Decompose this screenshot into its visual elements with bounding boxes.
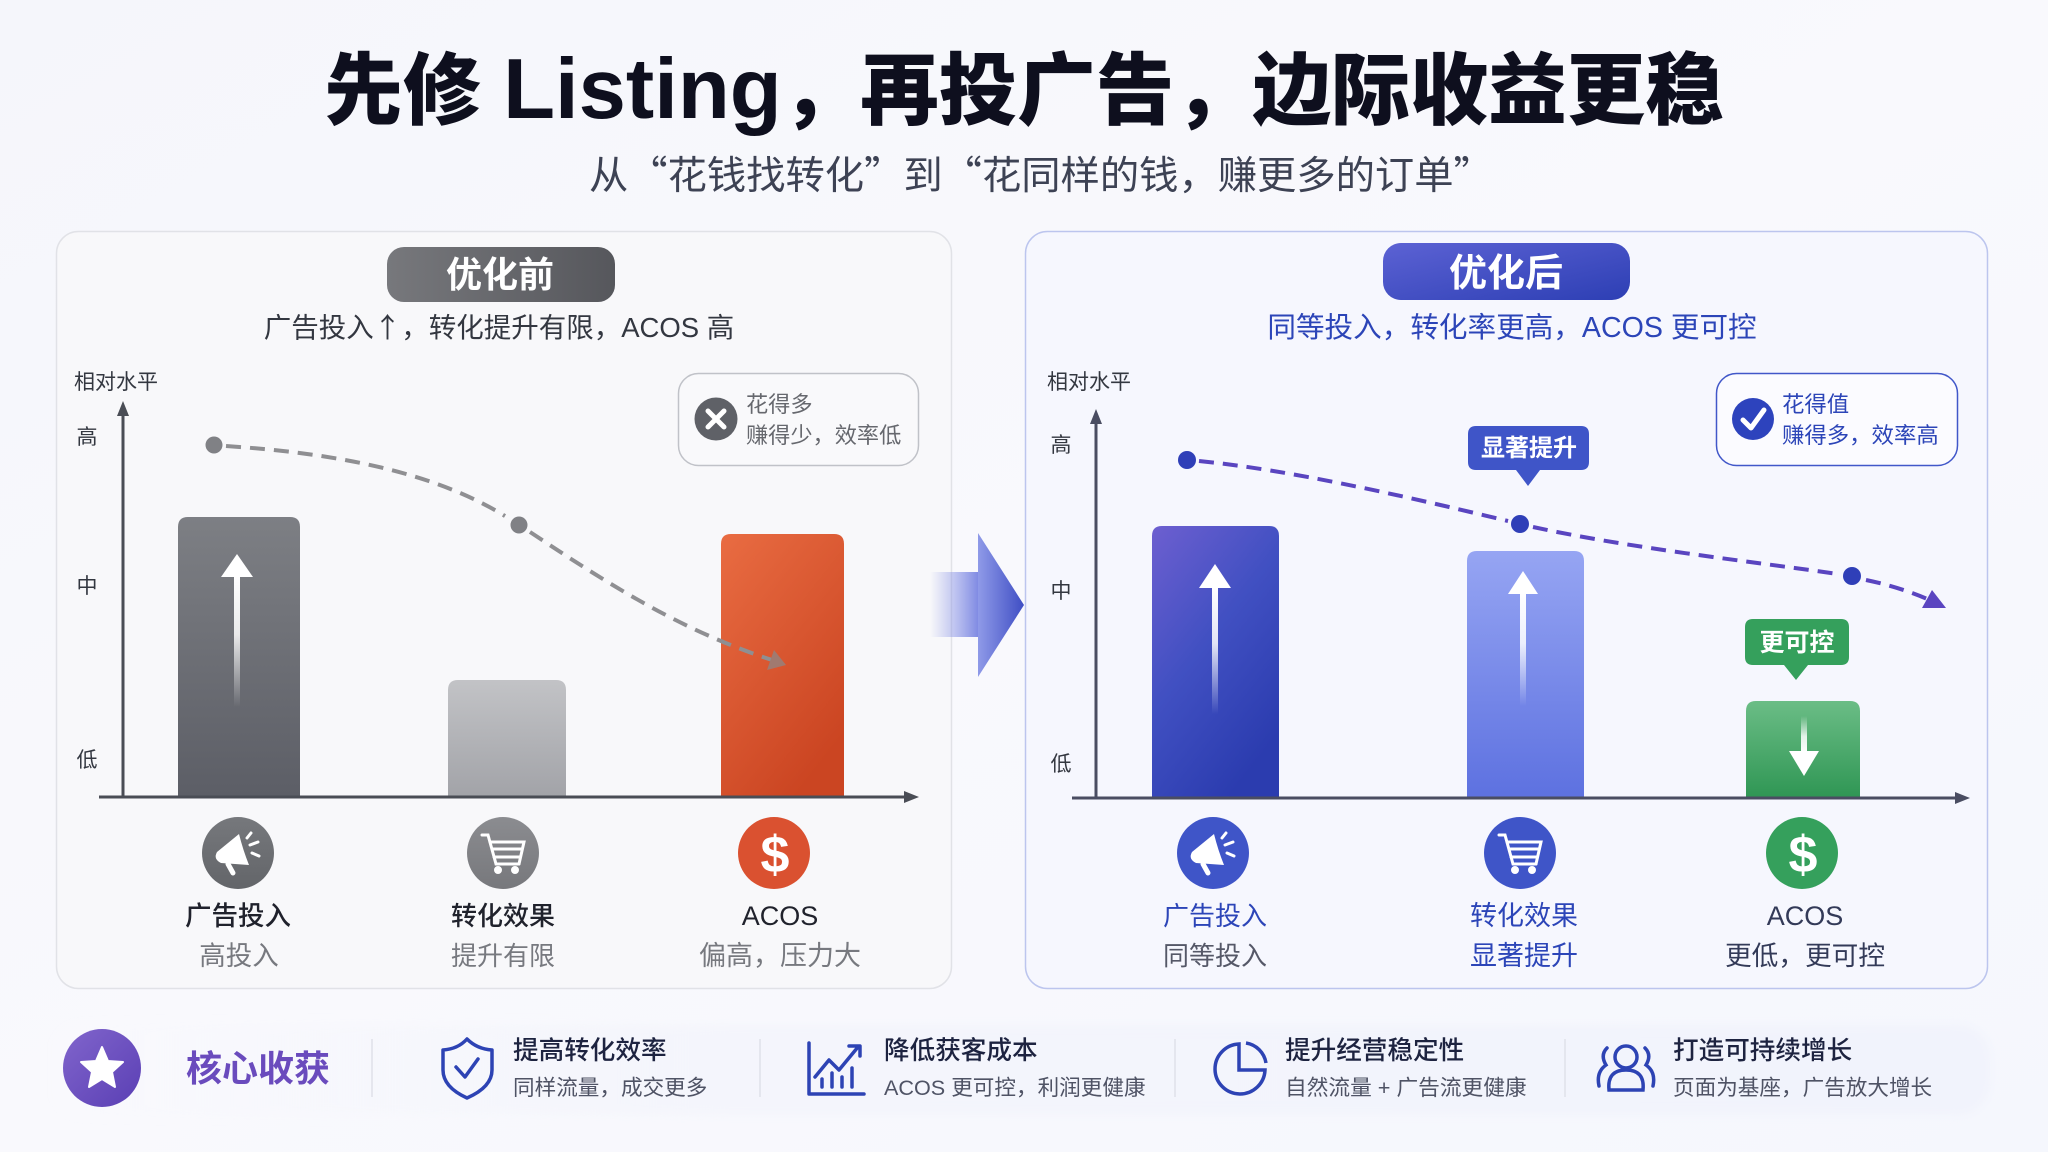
takeaway text (1673, 1036, 1932, 1100)
callout text (746, 392, 901, 448)
axes (1072, 409, 1970, 804)
label: ad spend: 高投入 (199, 941, 279, 971)
label: ACOS: ACOS (742, 901, 818, 931)
takeaway text: 同样流量，成交更多 (513, 1075, 707, 1100)
icon: cart blue (1484, 817, 1556, 889)
icon: star (63, 1029, 141, 1107)
y axis labels: 中 (76, 575, 98, 598)
label: ACOS: ACOS (1767, 901, 1843, 931)
arrow: before to after (930, 533, 1024, 677)
bar: ad spend (1152, 526, 1279, 798)
bar: ACOS (1746, 701, 1860, 798)
icon: dollar orange: $ (761, 826, 790, 884)
label: conversion: 转化效果 (1470, 901, 1578, 931)
axis title: 相对水平 (1047, 371, 1131, 394)
icon: cart grey (467, 817, 539, 889)
panel: after optimization (1026, 232, 1988, 988)
icon: megaphone grey (202, 817, 274, 889)
y axis labels: 低 (1050, 753, 1072, 776)
icon: growth chart (809, 1043, 864, 1094)
badge: after (1383, 243, 1630, 300)
arrow: conversion up (1508, 571, 1538, 706)
takeaway text: 提高转化效率 (513, 1036, 667, 1065)
takeaway text (884, 1036, 1146, 1100)
callout text: 赚得少，效率低 (746, 423, 901, 448)
label: ACOS: 偏高，压力大 (699, 941, 861, 971)
trend line: before (206, 436, 786, 670)
takeaway: stability (1215, 1036, 1527, 1100)
callout text: 赚得多，效率高 (1782, 423, 1939, 448)
callout text: 花得多 (746, 392, 813, 417)
label: ad spend (1163, 901, 1267, 971)
callout: significant lift (1468, 426, 1589, 486)
arrow: ad spend up (1199, 564, 1231, 714)
y axis labels: 中 (1050, 580, 1072, 603)
axis title: 相对水平 (74, 371, 158, 394)
bar: conversion (448, 680, 566, 797)
y axis labels: 高 (1050, 434, 1072, 457)
callout: more controllable (1745, 619, 1849, 680)
bar: conversion (1467, 551, 1584, 798)
y axis labels (1050, 434, 1072, 776)
takeaway: acquisition cost (809, 1036, 1146, 1100)
label: conversion: 转化效果 (451, 901, 555, 931)
arrow: ACOS down (1789, 716, 1819, 776)
takeaway text: 打造可持续增长 (1673, 1036, 1852, 1065)
callout: spend more earn less (678, 374, 918, 466)
callout: more controllable: 更可控 (1759, 629, 1835, 657)
bar: ad spend (178, 517, 300, 797)
takeaway text: 提升经营稳定性 (1285, 1036, 1464, 1065)
panel: before optimization (56, 232, 952, 988)
panel subtitle: 同等投入，转化率更高，ACOS 更可控 (1267, 312, 1757, 344)
takeaway: sustainable growth (1598, 1036, 1932, 1100)
icon: check (1732, 398, 1774, 440)
takeaway text: ACOS 更可控，利润更健康 (884, 1075, 1146, 1100)
label: ad spend: 广告投入 (185, 901, 291, 931)
callout: spend worth it (1716, 374, 1958, 466)
icon: pie chart (1215, 1043, 1266, 1094)
trend line: after (1178, 451, 1946, 608)
label: ad spend: 同等投入 (1163, 941, 1267, 971)
icon: shield (443, 1039, 492, 1098)
label: ACOS (1725, 901, 1885, 971)
takeaway text: 降低获客成本 (884, 1036, 1038, 1065)
icon: dollar green (1766, 817, 1838, 889)
takeaway text: 页面为基座，广告放大增长 (1673, 1075, 1932, 1100)
panel: key takeaways (48, 1025, 1990, 1115)
bar: ACOS (721, 534, 844, 797)
y axis labels: 低 (76, 749, 98, 772)
icon: dollar green: $ (1789, 826, 1818, 884)
icon: megaphone blue (1177, 817, 1249, 889)
badge: after: 优化后 (1449, 253, 1563, 295)
label: ACOS: 更低，更可控 (1725, 941, 1885, 971)
takeaway: conversion (443, 1036, 707, 1100)
takeaway text (1285, 1036, 1527, 1100)
label: ad spend (185, 901, 291, 971)
subtitle: 从“花钱找转化”到“花同样的钱，赚更多的订单” (589, 144, 1493, 201)
label: ad spend: 广告投入 (1163, 901, 1267, 931)
y axis labels (76, 426, 98, 772)
arrow: ad spend up (221, 554, 253, 707)
label: conversion: 提升有限 (451, 941, 555, 971)
y axis labels: 高 (76, 426, 98, 449)
icon: cross (694, 398, 738, 440)
panel subtitle: 广告投入↑，转化提升有限，ACOS 高 (264, 305, 734, 345)
takeaway text: 自然流量 + 广告流更健康 (1285, 1075, 1527, 1100)
callout: significant lift: 显著提升 (1481, 435, 1577, 462)
callout text: 花得值 (1782, 392, 1849, 417)
takeaway text (513, 1036, 707, 1100)
badge: before (387, 247, 615, 302)
axes (99, 401, 919, 803)
label: conversion: 显著提升 (1470, 941, 1578, 971)
label: ACOS (699, 901, 861, 971)
icon: people (1598, 1046, 1654, 1090)
icon: dollar orange (738, 817, 810, 889)
title: 先修 Listing，再投广告，边际收益更稳 (324, 42, 1724, 137)
badge: before: 优化前 (446, 254, 554, 295)
heading: takeaways: 核心收获 (186, 1048, 330, 1089)
label: conversion (451, 901, 555, 971)
callout text (1782, 392, 1939, 448)
label: conversion (1470, 901, 1578, 971)
